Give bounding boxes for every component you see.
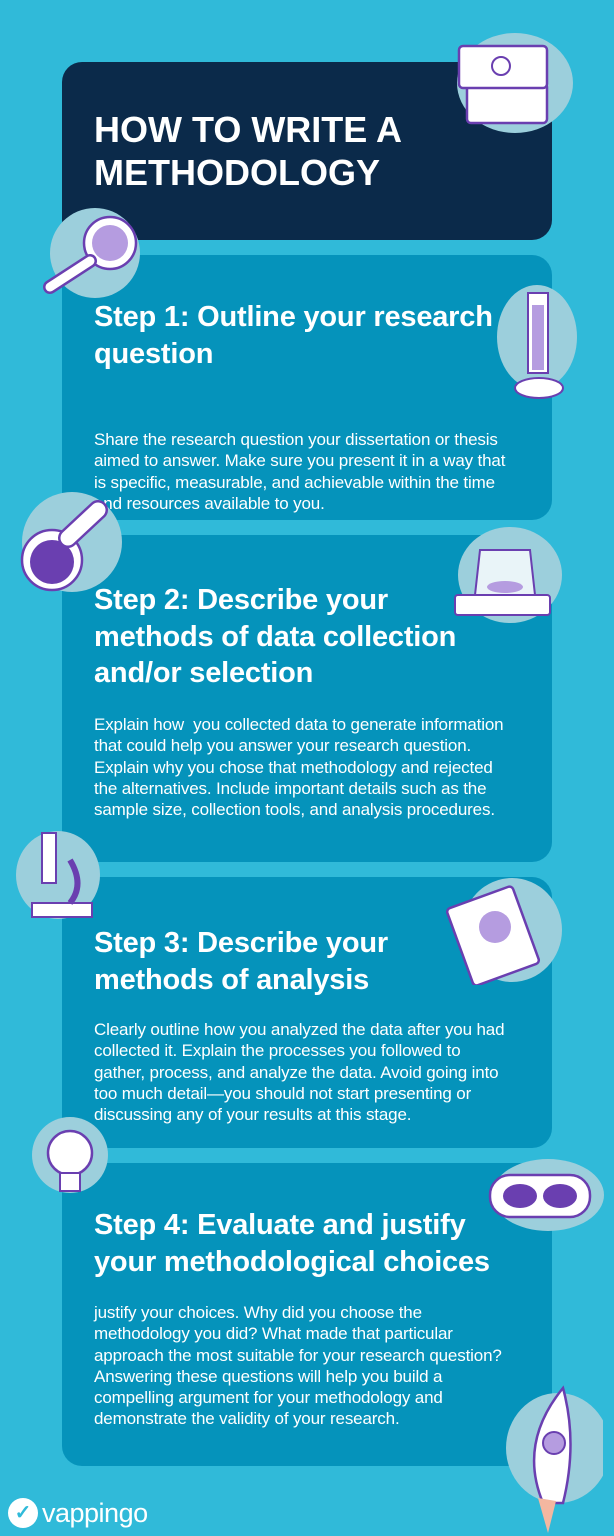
heading: step 4: Step 4: Evaluate and justify <box>94 1209 466 1241</box>
icon: microscope <box>16 831 100 919</box>
logo: vappingo: ✓ <box>15 1502 31 1524</box>
icon: lightbulb <box>32 1117 108 1193</box>
text: step 2 <box>94 715 503 819</box>
heading: step 3: Step 3: Describe your <box>94 927 388 959</box>
heading: step 2 <box>94 584 456 689</box>
heading: step 3 <box>94 927 388 996</box>
icon: clipboard <box>446 878 562 985</box>
text: step 1: aimed to answer. Make sure you present it in a way that <box>94 451 505 470</box>
text: step 3: too much detail—you should not start presenting or <box>94 1084 471 1103</box>
text: step 1: is specific, measurable, and achievable within the time <box>94 473 495 492</box>
panel: step 1 <box>62 255 552 520</box>
title: METHODOLOGY <box>94 152 380 193</box>
text: step 4: justify your choices. Why did you choose the <box>94 1303 422 1322</box>
text: step 2: Explain why you chose that methodology and rejected <box>94 758 493 777</box>
icon: rocket <box>506 1386 603 1533</box>
icon: flask <box>20 492 122 592</box>
text: step 1 <box>94 430 506 513</box>
text: step 3 <box>94 1020 504 1124</box>
text: step 2: that could help you answer your research question. <box>94 736 471 755</box>
panel: step 3 <box>62 877 552 1148</box>
text: step 4 <box>94 1303 502 1428</box>
heading: step 4 <box>94 1209 490 1278</box>
heading: step 2: Step 2: Describe your <box>94 584 388 616</box>
heading: step 4: your methodological choices <box>94 1246 490 1278</box>
heading: step 1: question <box>94 338 213 370</box>
title panel <box>62 62 552 240</box>
text: step 4: approach the most suitable for your research question? <box>94 1346 502 1365</box>
icon: goggles <box>488 1159 604 1231</box>
title <box>94 109 402 193</box>
text: step 3: gather, process, and analyze the data. Avoid going into <box>94 1063 498 1082</box>
heading: step 2: methods of data collection <box>94 620 456 652</box>
text: step 4: methodology you did? What made that particular <box>94 1324 453 1343</box>
text: step 2: the alternatives. Include important details such as the <box>94 779 486 798</box>
text: step 1: Share the research question your dissertation or thesis <box>94 430 498 449</box>
text: step 2: sample size, collection tools, and analysis procedures. <box>94 800 495 819</box>
text: step 3: discussing any of your results at this stage. <box>94 1105 411 1124</box>
text: step 3: collected it. Explain the processes you followed to <box>94 1041 461 1060</box>
heading: step 3: methods of analysis <box>94 964 369 996</box>
icon: books <box>457 33 573 133</box>
logo: vappingo: vappingo <box>42 1498 148 1528</box>
panel: step 4 <box>62 1163 552 1466</box>
text: step 2: Explain how you collected data to generate information <box>94 715 503 734</box>
icon: magnifier <box>43 208 140 298</box>
text: step 4: compelling argument for your methodology and <box>94 1388 443 1407</box>
heading: step 1 <box>94 301 493 370</box>
text: step 3: Clearly outline how you analyzed the data after you had <box>94 1020 504 1039</box>
text: step 1: and resources available to you. <box>94 494 325 513</box>
text: step 4: Answering these questions will help you build a <box>94 1367 442 1386</box>
title: HOW TO WRITE A <box>94 109 402 150</box>
icon: cylinder <box>497 285 577 399</box>
heading: step 2: and/or selection <box>94 657 313 689</box>
panel: step 2 <box>62 535 552 862</box>
text: step 4: demonstrate the validity of your research. <box>94 1409 400 1428</box>
icon: scale <box>454 527 562 623</box>
heading: step 1: Step 1: Outline your research <box>94 301 493 333</box>
